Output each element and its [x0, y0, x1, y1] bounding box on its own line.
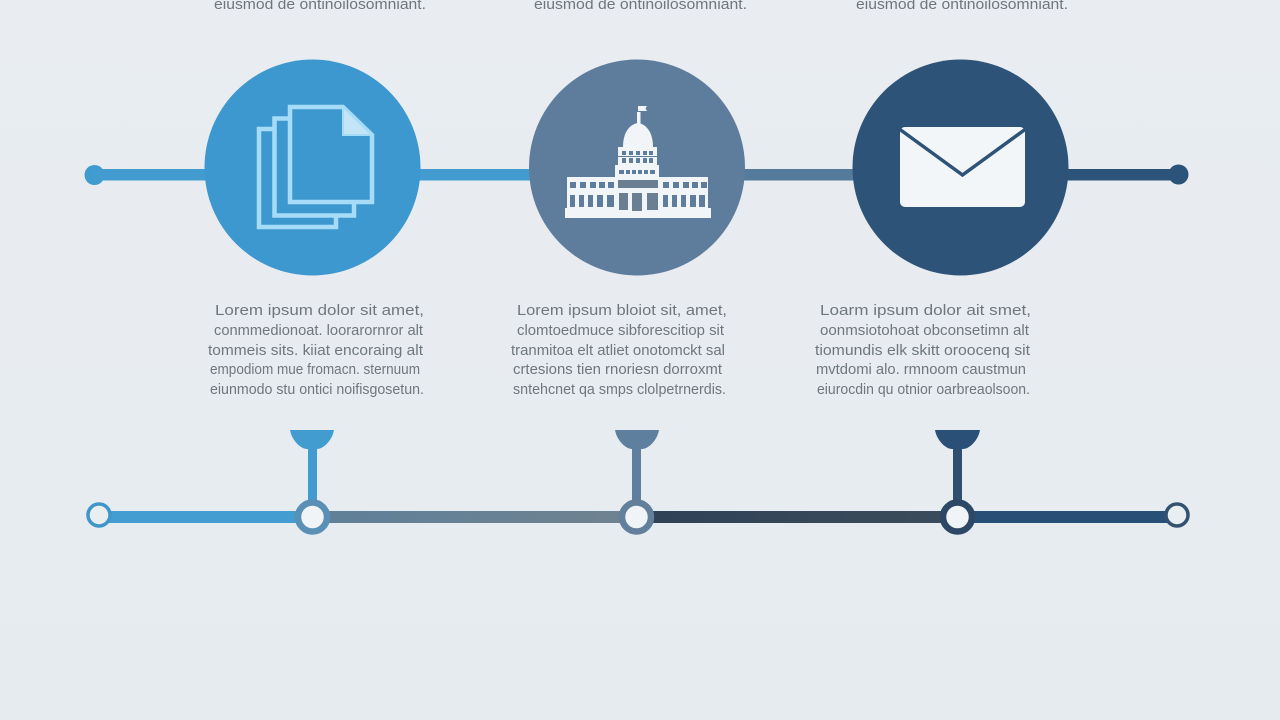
- circle: documents: [204, 60, 420, 276]
- circle: capitol: [529, 60, 745, 276]
- text block: column two: tranmitoa elt atliet onotomckt sal: [511, 342, 725, 359]
- lower timeline: [88, 430, 1188, 532]
- text block: column three: oonmsiotohoat obconsetimn alt: [820, 322, 1030, 339]
- text block: column three: Loarm ipsum dolor ait smet,: [820, 302, 1031, 319]
- track segments: [108, 511, 1168, 523]
- circle: mail: [852, 60, 1068, 276]
- text block: column one: eiunmodo stu ontici noifisgosetun.: [210, 381, 424, 398]
- panel: documents step: [204, 60, 420, 276]
- text block: column three: tiomundis elk skitt oroocenq sit: [815, 342, 1031, 359]
- upper timeline connector: [84, 164, 1188, 185]
- icon: stacked documents: [259, 107, 372, 227]
- text block: column three: [815, 302, 1031, 398]
- top cropped text row: [214, 0, 1068, 13]
- text block: column three: mvtdomi alo. rmnoom caustmun: [816, 361, 1026, 378]
- text block: column one: tommeis sits. kiiat encoraing alt: [208, 342, 424, 359]
- marker one: [290, 430, 334, 532]
- marker three: [935, 430, 980, 532]
- panel: capitol step: [529, 60, 745, 276]
- icon: capitol building: [565, 106, 711, 218]
- text block: column two: Lorem ipsum bloiot sit, amet,: [517, 302, 727, 319]
- text block: column two: [511, 302, 727, 398]
- text block: column one: empodiom mue fromacn. sternuum: [210, 361, 420, 378]
- end ring: [1166, 504, 1188, 526]
- text block: column one: conmmedionoat. loorarornror alt: [214, 322, 424, 339]
- icon: envelope: [900, 127, 1025, 207]
- marker two: [615, 430, 659, 532]
- text block: column two: crtesions tien rnoriesn dorroxmt: [513, 361, 723, 378]
- text block: column one: [208, 302, 424, 398]
- text block: column two: clomtoedmuce sibforescitiop sit: [517, 322, 725, 339]
- text block: column three: eiurocdin qu otnior oarbreaolsoon.: [817, 381, 1030, 398]
- start ring: [88, 504, 110, 526]
- text block: column one: Lorem ipsum dolor sit amet,: [215, 302, 424, 319]
- text block: column two: sntehcnet qa smps clolpetrnerdis.: [513, 381, 726, 398]
- panel: mail step: [852, 60, 1068, 276]
